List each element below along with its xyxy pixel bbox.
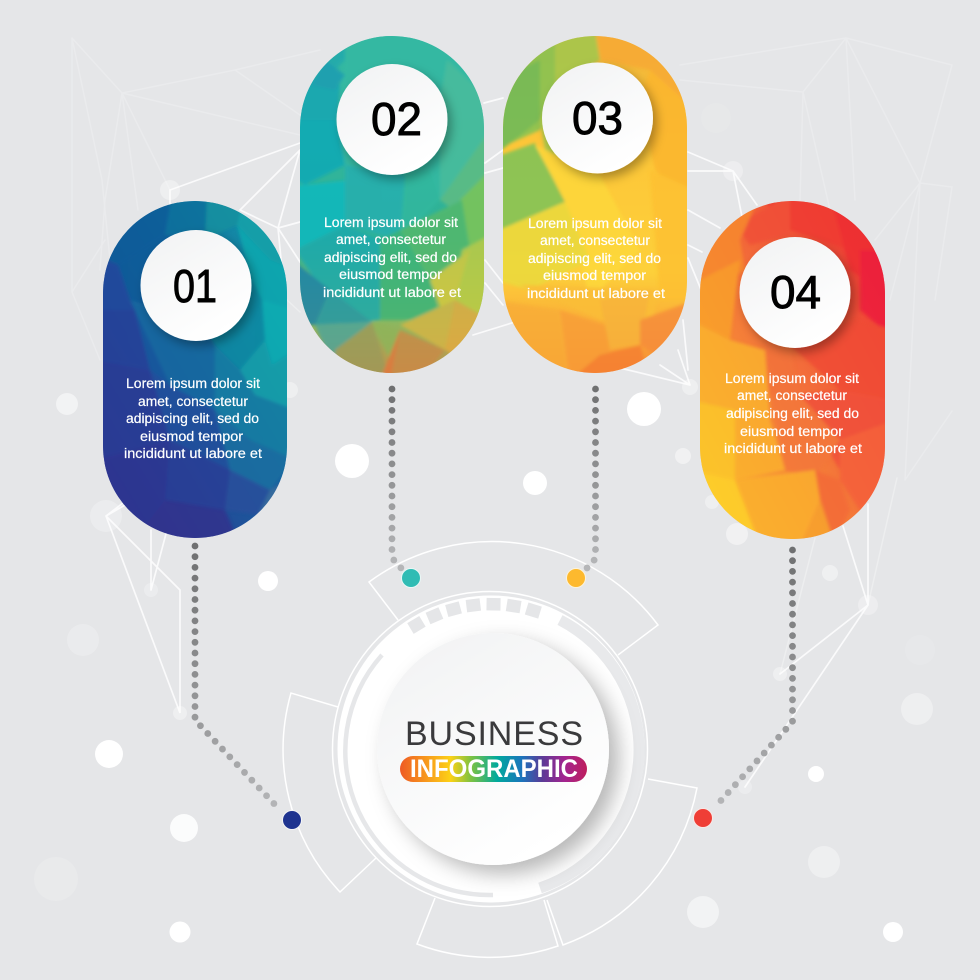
panel 04 text: Lorem ipsum dolor sit xyxy=(725,371,859,386)
panel 03 text: adipiscing elit, sed do xyxy=(528,251,661,266)
panel 04 text xyxy=(724,371,862,456)
panel 04 text: adipiscing elit, sed do xyxy=(726,406,859,421)
panel 04 low-poly background xyxy=(700,201,885,539)
panel 03 xyxy=(503,36,687,373)
panel 01 number badge: 01 xyxy=(173,260,217,312)
central hub rings xyxy=(332,592,648,906)
panel 03 text: Lorem ipsum dolor sit xyxy=(528,216,662,231)
panel 02 text: eiusmod tempor xyxy=(339,267,443,282)
panel 02 xyxy=(295,30,490,380)
dotted connector 3 xyxy=(566,389,596,588)
background network lines xyxy=(72,38,952,787)
dotted connector 1 xyxy=(195,546,302,830)
panel 01 text: Lorem ipsum dolor sit xyxy=(126,376,260,391)
panel 01 text: amet, consectetur xyxy=(138,394,249,409)
panel 03 text: incididunt ut labore et xyxy=(527,286,665,301)
panel 04 number badge: 04 xyxy=(770,266,821,318)
panel 01 low-poly background xyxy=(103,201,287,538)
panel 04 number badge xyxy=(740,237,850,348)
panel 01 text: eiusmod tempor xyxy=(140,429,244,444)
panel 03 number badge xyxy=(542,62,653,174)
panel 01 text: adipiscing elit, sed do xyxy=(126,411,259,426)
title: business: BUSINESS xyxy=(405,715,583,753)
panel 03 number badge: 03 xyxy=(572,92,623,144)
panel 04 xyxy=(700,201,885,539)
panel 02 number badge: 02 xyxy=(371,93,422,145)
panel 03 low-poly background xyxy=(503,36,687,373)
panel 02 number badge xyxy=(336,64,448,175)
dotted connector 2 xyxy=(392,389,420,588)
dotted connector 4 xyxy=(694,550,792,828)
panel 01 text: incididunt ut labore et xyxy=(124,446,262,461)
panel 04 text: amet, consectetur xyxy=(737,388,848,403)
panel 04 text: eiusmod tempor xyxy=(740,424,844,439)
panel 03 text: amet, consectetur xyxy=(540,233,651,248)
panel 02 text: amet, consectetur xyxy=(336,232,447,247)
panel 02 text: Lorem ipsum dolor sit xyxy=(324,215,458,230)
panel 01 text xyxy=(124,376,262,461)
panel 01 xyxy=(103,201,287,538)
outer hub segments xyxy=(283,542,697,957)
central disc with title xyxy=(377,633,609,865)
panel 02 text: incididunt ut labore et xyxy=(323,285,461,300)
panel 02 low-poly background xyxy=(295,30,490,380)
panel 04 text: incididunt ut labore et xyxy=(724,441,862,456)
panel 03 text xyxy=(527,216,665,301)
panel 03 text: eiusmod tempor xyxy=(543,268,647,283)
background dots xyxy=(34,103,935,942)
panel 02 text xyxy=(323,215,461,300)
panel 02 text: adipiscing elit, sed do xyxy=(324,250,457,265)
title: infographic badge: INFOGRAPHIC xyxy=(410,755,578,783)
panel 01 number badge xyxy=(140,230,252,341)
